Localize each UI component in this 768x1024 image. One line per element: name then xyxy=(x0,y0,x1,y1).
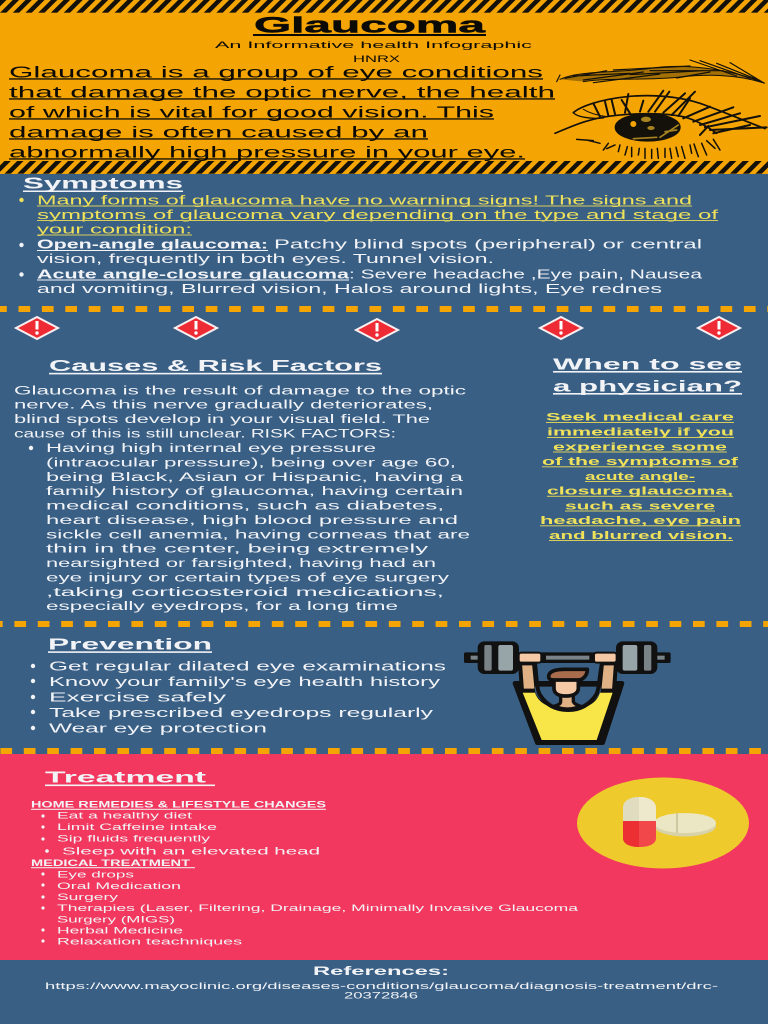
risk factors list: (intraocular pressure), being over age 60, xyxy=(46,457,456,469)
open-angle glaucoma text: Open-angle glaucoma: xyxy=(37,238,268,252)
panel: when to see a physician xyxy=(540,356,742,542)
heading: treatment: Treatment xyxy=(45,770,207,787)
causes paragraph: Glaucoma is the result of damage to the optic xyxy=(14,385,466,397)
risk factors list: thin in the center, being extremely xyxy=(46,544,429,556)
panel: prevention xyxy=(31,636,671,743)
open-angle glaucoma text: vision, frequently in both eyes. Tunnel vision. xyxy=(37,252,494,266)
risk factors list: family history of glaucoma, having certain xyxy=(46,486,463,498)
panel: treatment xyxy=(0,754,768,960)
physician advice: closure glaucoma, xyxy=(547,486,733,498)
intro text: that damage the optic nerve, the health xyxy=(9,84,555,101)
home remedies list: Sleep with an elevated head xyxy=(62,845,320,857)
physician advice xyxy=(540,412,742,542)
medical treatment list: Surgery (MIGS) xyxy=(57,914,175,924)
risk factors list xyxy=(29,443,470,613)
prevention list: Exercise safely xyxy=(49,691,228,705)
physician advice: Seek medical care xyxy=(546,412,734,424)
heading: symptoms: Symptoms xyxy=(23,176,183,193)
icon: warning diamonds xyxy=(16,317,740,341)
acute angle-closure glaucoma text xyxy=(19,267,702,296)
prevention list: Know your family's eye health history xyxy=(49,675,441,689)
intro text xyxy=(9,64,555,161)
acute angle-closure glaucoma text: Acute angle-closure glaucoma xyxy=(37,267,351,281)
acute angle-closure glaucoma text: and vomiting, Blurred vision, Halos around lights, Eye rednes xyxy=(37,282,662,296)
acute angle-closure glaucoma text: : Severe headache ,Eye pain, Nausea xyxy=(349,267,702,281)
intro text: damage is often caused by an xyxy=(9,124,428,141)
risk factors list: eye injury or certain types of eye surgery xyxy=(46,572,449,584)
medical treatment list: Oral Medication xyxy=(57,881,181,891)
reference url: https://www.mayoclinic.org/diseases-conditions/glaucoma/diagnosis-treatment/drc- xyxy=(45,981,718,992)
home remedies list: HOME REMEDIES & LIFESTYLE CHANGES xyxy=(31,800,326,811)
medical treatment list: Eye drops xyxy=(57,870,135,880)
heading: when to see a physician xyxy=(553,356,742,395)
medical treatment list: Herbal Medicine xyxy=(57,925,183,935)
medical treatment list xyxy=(31,858,578,947)
heading: when to see a physician: When to see xyxy=(553,356,742,373)
warning signs text: symptoms of glaucoma vary depending on the type and stage of xyxy=(37,208,719,222)
intro text: of which is vital for good vision. This xyxy=(9,104,494,121)
icon: pills xyxy=(577,778,749,868)
medical treatment list: Therapies (Laser, Filtering, Drainage, Minimally Invasive Glaucoma xyxy=(57,903,578,913)
risk factors list: medical conditions, such as diabetes, xyxy=(46,500,444,512)
medical treatment list: Surgery xyxy=(57,892,119,902)
warning signs text: Many forms of glaucoma have no warning signs! The signs and xyxy=(37,194,692,208)
author: HNRX xyxy=(353,54,401,65)
prevention list xyxy=(31,660,446,736)
intro text: Glaucoma is a group of eye conditions xyxy=(9,64,543,81)
panel: causes and risk factors xyxy=(14,358,470,613)
medical treatment list: Relaxation teachniques xyxy=(57,937,243,947)
prevention list: Get regular dilated eye examinations xyxy=(49,660,446,674)
physician advice: such as severe xyxy=(565,500,715,512)
physician advice: acute angle- xyxy=(585,471,696,483)
heading: when to see a physician: a physician? xyxy=(553,378,742,395)
causes paragraph: cause of this is still unclear. RISK FACTORS: xyxy=(14,428,396,440)
heading: causes: Causes & Risk Factors xyxy=(49,358,382,375)
heading: references: References: xyxy=(313,964,449,978)
prevention list: Take prescribed eyedrops regularly xyxy=(49,706,434,720)
risk factors list: Having high internal eye pressure xyxy=(46,443,376,455)
warning signs text: your condition: xyxy=(37,222,192,236)
causes paragraph: nerve. As this nerve gradually deteriorates, xyxy=(14,400,433,412)
medical treatment list: MEDICAL TREATMENT xyxy=(31,858,190,869)
reference url xyxy=(45,981,718,1002)
prevention list: Wear eye protection xyxy=(49,722,267,736)
open-angle glaucoma text: Patchy blind spots (peripheral) or central xyxy=(274,238,702,252)
title: Glaucoma xyxy=(254,13,486,38)
open-angle glaucoma text xyxy=(19,238,702,266)
heading: prevention: Prevention xyxy=(48,636,212,654)
home remedies list: Limit Caffeine intake xyxy=(57,822,217,832)
physician advice: headache, eye pain xyxy=(540,515,742,527)
panel: symptoms xyxy=(19,176,719,296)
warning signs text xyxy=(19,194,719,236)
risk factors list: ,taking corticosteroid medications, xyxy=(46,587,444,599)
intro text: abnormally high pressure in your eye. xyxy=(9,144,525,161)
physician advice: of the symptoms of xyxy=(542,456,739,468)
icon: eye xyxy=(555,60,767,158)
causes paragraph: blind spots develop in your visual field. The xyxy=(14,414,430,426)
reference url: 20372846 xyxy=(344,990,418,1002)
risk factors list: nearsighted or farsighted, having had an xyxy=(46,558,436,570)
panel: header xyxy=(0,0,768,174)
risk factors list: especially eyedrops, for a long time xyxy=(46,601,398,613)
icon: weightlifter xyxy=(464,641,671,743)
risk factors list: sickle cell anemia, having corneas that are xyxy=(46,529,470,541)
risk factors list: heart disease, high blood pressure and xyxy=(46,515,458,527)
physician advice: immediately if you xyxy=(547,426,734,438)
home remedies list: Eat a healthy diet xyxy=(57,811,193,821)
causes paragraph xyxy=(14,385,466,440)
physician advice: experience some xyxy=(553,441,727,453)
panel: references xyxy=(45,964,718,1002)
home remedies list xyxy=(31,800,326,857)
subtitle: An Informative health Infographic xyxy=(215,40,533,51)
physician advice: and blurred vision. xyxy=(549,530,733,542)
home remedies list: Sip fluids frequently xyxy=(57,834,211,844)
risk factors list: being Black, Asian or Hispanic, having a xyxy=(46,472,464,484)
